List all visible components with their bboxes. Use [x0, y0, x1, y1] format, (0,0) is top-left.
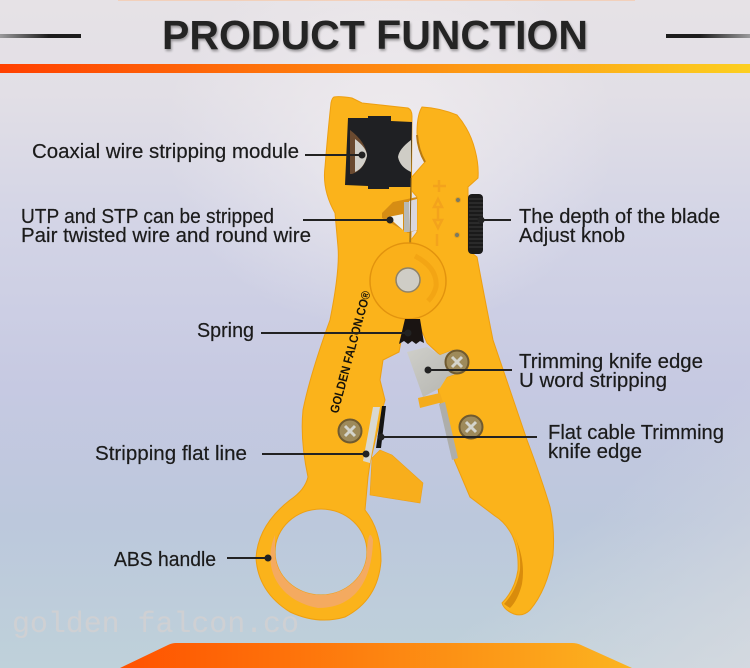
label: stripping flat line — [95, 443, 370, 465]
label: trimming knife edge: U word stripping — [519, 370, 667, 392]
label: spring: Spring — [197, 320, 254, 342]
label: flat cable trimming knife edge: Flat cable Trimming — [548, 422, 724, 444]
trigger wedge — [370, 450, 423, 503]
right handle — [411, 107, 554, 615]
header gradient bar — [0, 64, 750, 73]
label: ABS handle — [114, 549, 272, 571]
watermark: golden falcon.co — [12, 608, 299, 642]
label: UTP and STP: UTP and STP can be stripped — [21, 206, 274, 228]
label: trimming knife edge: Trimming knife edge — [519, 351, 703, 373]
upper jaw notch rim — [417, 135, 425, 162]
label: UTP and STP — [21, 206, 394, 247]
right blade window — [398, 140, 411, 172]
plus minus marks — [433, 180, 446, 246]
label: coaxial wire stripping module: Coaxial wire stripping module — [32, 141, 299, 163]
label: UTP and STP: Pair twisted wire and round wire — [21, 225, 311, 247]
adjust knob — [468, 194, 483, 254]
wire stripper tool — [256, 97, 554, 620]
title rule left — [0, 34, 81, 38]
label: flat cable trimming knife edge: knife edge — [548, 441, 642, 463]
hook inner shade — [504, 535, 523, 608]
label: ABS handle: ABS handle — [114, 549, 216, 571]
spring — [399, 319, 424, 344]
label: blade depth knob: Adjust knob — [519, 225, 625, 247]
small rivets — [454, 197, 461, 238]
UTP blade — [388, 214, 403, 230]
pivot disc — [370, 243, 446, 319]
title rule right — [666, 34, 750, 38]
label: stripping flat line: Stripping flat line — [95, 443, 247, 465]
left blade window — [350, 130, 367, 174]
label: flat cable trimming knife edge — [378, 422, 724, 463]
coaxial module — [345, 116, 412, 189]
footer gradient band — [120, 643, 632, 668]
label: blade depth knob — [478, 206, 720, 247]
title: PRODUCT FUNCTION — [162, 12, 588, 58]
slot opening — [409, 199, 417, 232]
jaw seam — [410, 178, 411, 243]
flat cable blade — [439, 402, 458, 460]
blade yellow tab — [418, 393, 443, 408]
wire gap — [382, 197, 417, 233]
black flat edge — [376, 406, 386, 448]
ring inner band — [270, 535, 373, 608]
label: spring — [197, 320, 412, 342]
label: trimming knife edge — [424, 351, 703, 392]
label: blade depth knob: The depth of the blade — [519, 206, 720, 228]
title: PRODUCT FUNCTION — [163, 14, 589, 60]
stripping flat blade — [363, 407, 380, 463]
screws — [338, 350, 482, 442]
upper trimming blade — [407, 347, 467, 397]
disc arrow — [415, 256, 436, 301]
left handle with ring — [256, 97, 412, 620]
UTP steel — [404, 202, 409, 232]
brand text: GOLDEN FALCON.CO® — [327, 289, 374, 415]
rivet — [396, 268, 420, 292]
